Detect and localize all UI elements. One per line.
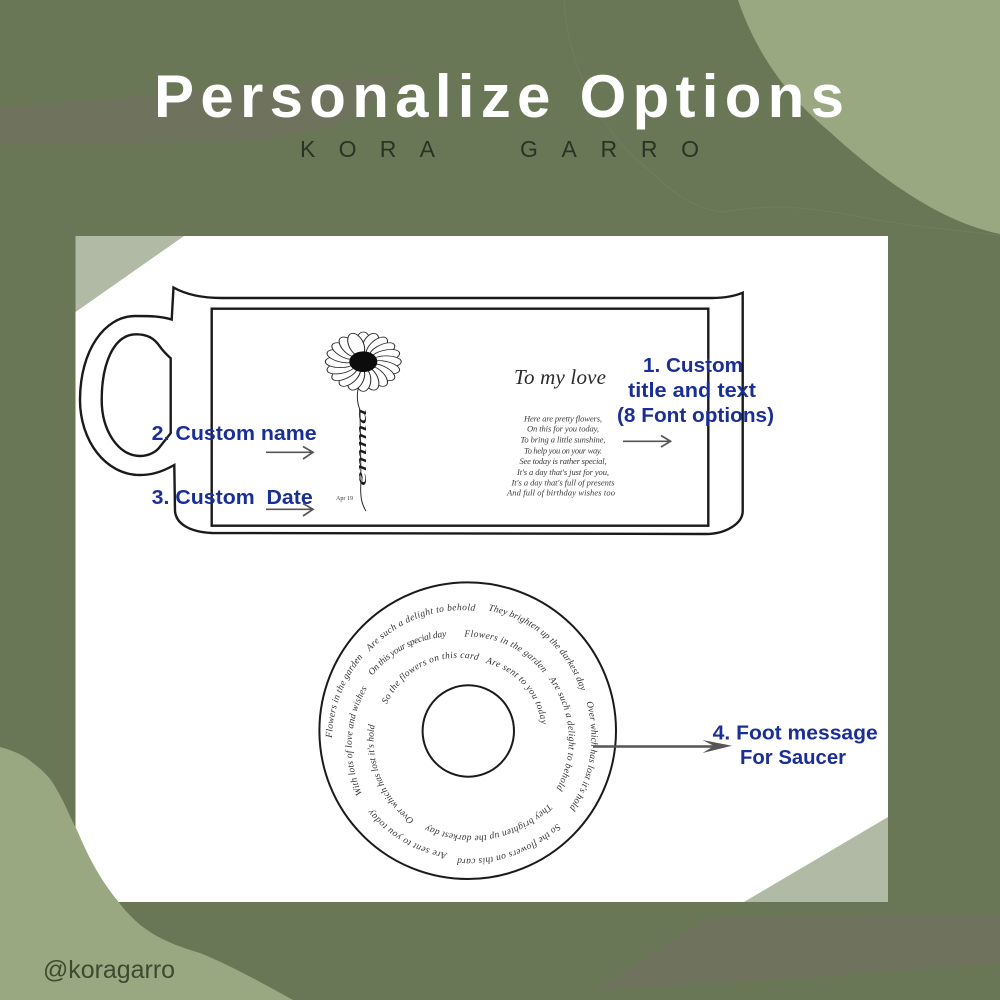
label: custom name: 2. Custom name bbox=[152, 423, 317, 445]
arrow: custom name bbox=[266, 446, 313, 459]
saucer outer rim bbox=[319, 582, 616, 879]
icon: daisy flower bbox=[325, 332, 402, 392]
brown band bottom right bbox=[597, 913, 1000, 990]
brown band top left bbox=[0, 75, 408, 143]
poem text bbox=[506, 414, 615, 498]
poem text: See today is rather special, bbox=[520, 456, 606, 466]
poem text: To help you on your way. bbox=[524, 445, 602, 455]
foot message spiral text: On this your special day bbox=[369, 631, 446, 674]
subtitle bbox=[300, 136, 699, 162]
flower stem bbox=[357, 388, 366, 511]
foot message spiral text: Flowers in the garden bbox=[326, 655, 362, 738]
poem text: And full of birthday wishes too bbox=[506, 488, 615, 498]
flower centre bbox=[349, 351, 377, 372]
mug outline bbox=[80, 288, 743, 534]
arrow: custom title bbox=[623, 436, 670, 447]
poem text: On this for you today, bbox=[527, 424, 599, 434]
saucer bbox=[318, 581, 617, 880]
thin contour line top right bbox=[564, 0, 1000, 235]
arrow: foot message bbox=[593, 740, 732, 753]
foot message spiral text: Flowers in the garden bbox=[464, 630, 546, 672]
label: foot message for saucer: 4. Foot message bbox=[713, 722, 878, 744]
foot message spiral text: Are sent to you today bbox=[485, 658, 546, 724]
foot message spiral text: Are such a delight to behold bbox=[548, 678, 576, 792]
subtitle: KORA bbox=[300, 136, 436, 162]
blob top right bbox=[738, 0, 1000, 234]
label: foot message for saucer: For Saucer bbox=[740, 747, 846, 769]
foot message spiral text: Are sent to you today bbox=[368, 810, 448, 858]
subtitle: GARRO bbox=[520, 136, 699, 162]
corner triangle bottom right bbox=[744, 817, 888, 902]
blob bottom left bbox=[0, 747, 293, 1000]
corner triangle top left bbox=[76, 236, 184, 312]
foot message spiral text bbox=[326, 604, 598, 865]
poem text: It's a day that's just for you, bbox=[516, 467, 609, 477]
label: custom date: 3. Custom Date bbox=[152, 487, 313, 509]
panel: white card bbox=[76, 236, 888, 902]
poem title: To my love bbox=[514, 365, 606, 389]
mug handle inner bbox=[102, 334, 171, 456]
handle text: @koragarro bbox=[43, 956, 175, 984]
poem text: Here are pretty flowers, bbox=[523, 414, 602, 424]
saucer foot ring bbox=[423, 685, 514, 777]
foot message spiral text: They brighten up the darkest day bbox=[425, 804, 552, 842]
arrow: custom date bbox=[266, 504, 313, 516]
label: custom title and text: title and text bbox=[628, 380, 756, 402]
foot message spiral text: Are such a delight to behold bbox=[367, 604, 476, 652]
label: foot message for saucer bbox=[713, 722, 878, 769]
poem text: It's a day that's full of presents bbox=[510, 478, 615, 488]
custom date: Apr 19 bbox=[336, 496, 353, 502]
mug print area bbox=[212, 309, 708, 526]
foot message spiral text: So the flowers on this card bbox=[382, 652, 480, 704]
label: custom title and text: (8 Font options) bbox=[617, 405, 774, 427]
label: custom title and text bbox=[617, 355, 774, 427]
poem text: To bring a little sunshine, bbox=[520, 434, 606, 444]
foot message spiral text: Over which has lost it's hold bbox=[366, 724, 413, 824]
foot message spiral text: Over which has lost it's hold bbox=[570, 702, 598, 812]
foot message spiral text: They brighten up the darkest day bbox=[489, 604, 586, 690]
foot message spiral text: So the flowers on this card bbox=[456, 824, 560, 865]
title: Personalize Options bbox=[154, 63, 844, 130]
label: custom title and text: 1. Custom bbox=[643, 355, 743, 377]
foot message spiral text: With lots of love and wishes bbox=[345, 686, 366, 796]
custom name on stem: emma bbox=[354, 408, 370, 486]
